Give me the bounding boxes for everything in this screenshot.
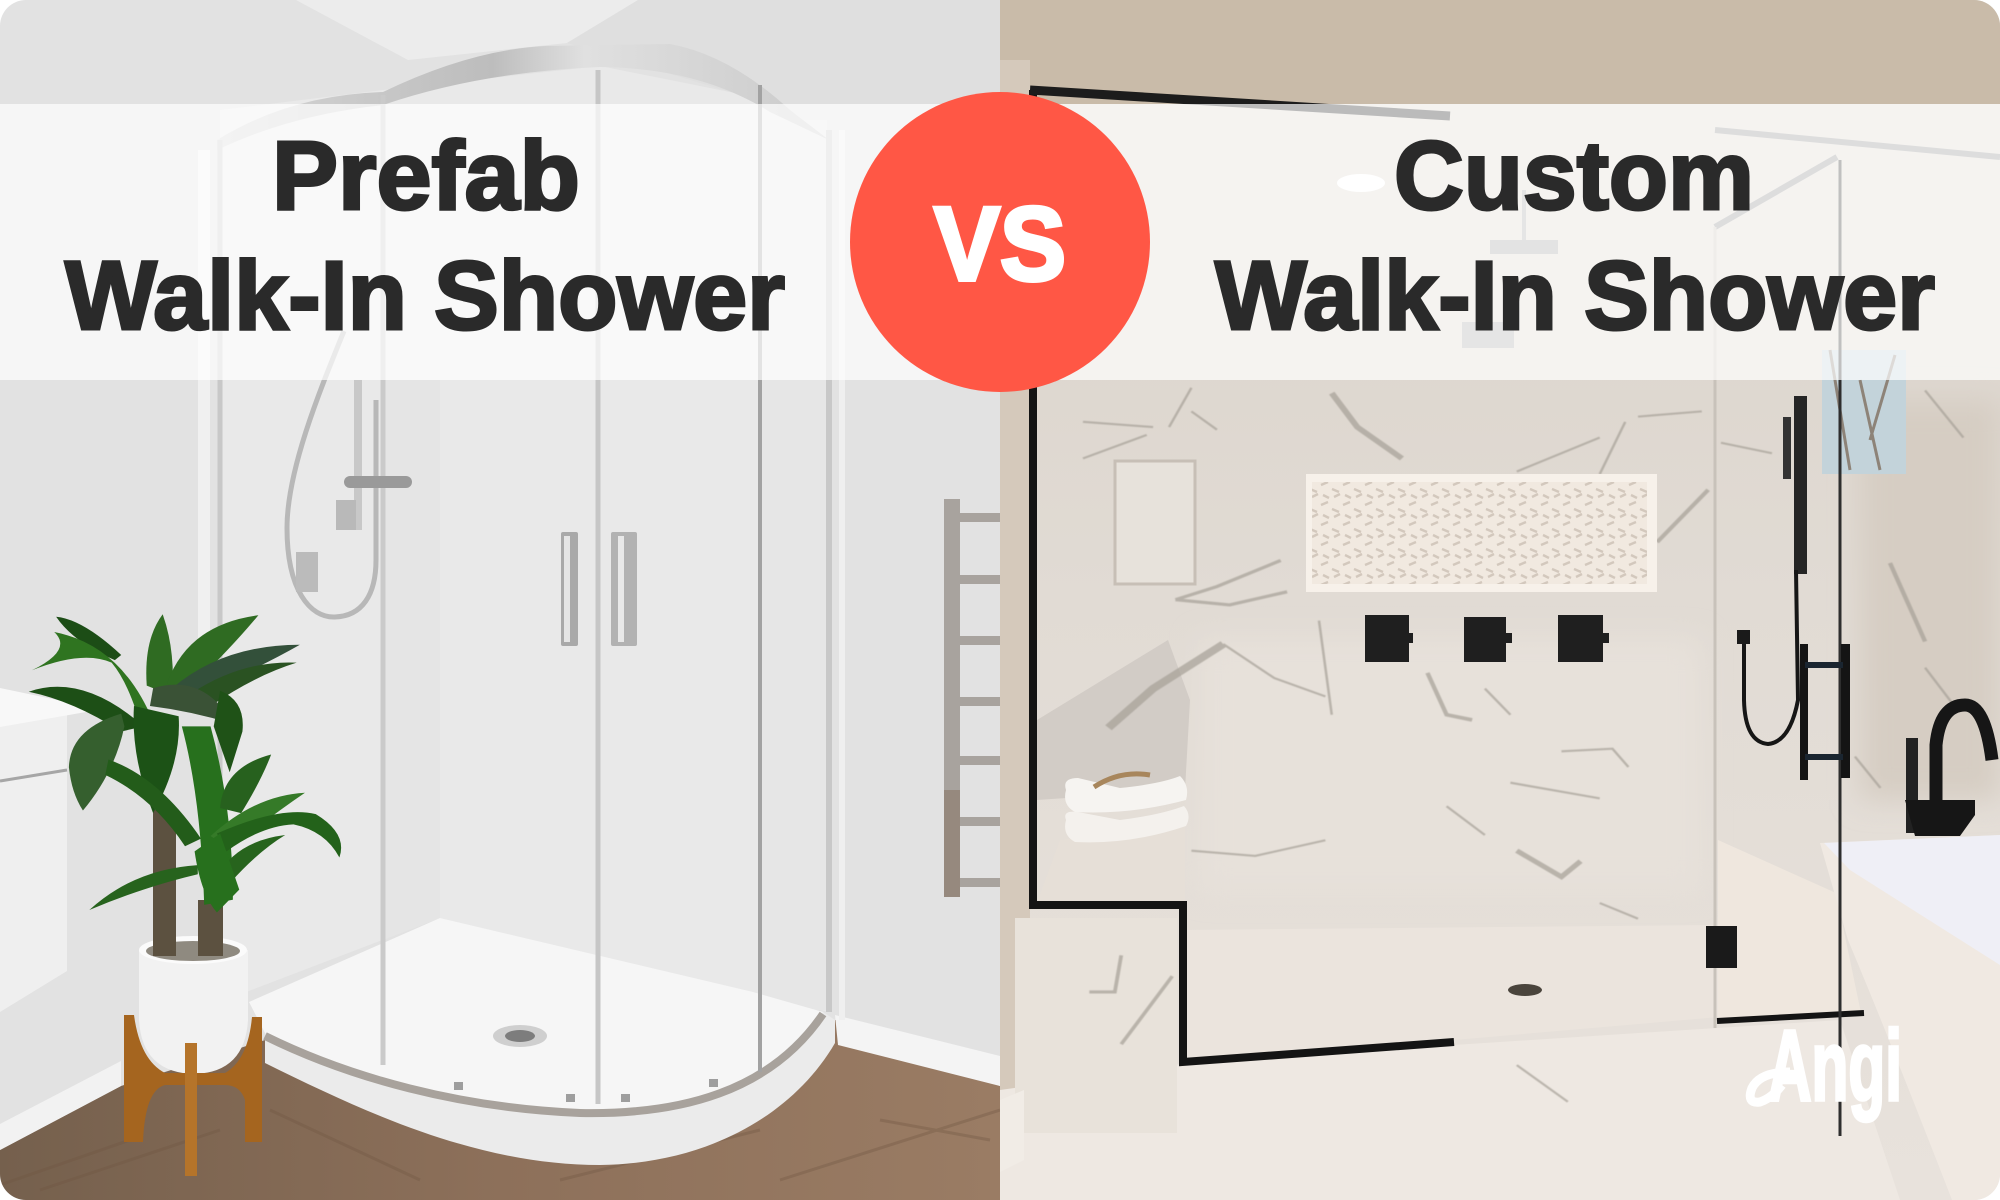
wooden stand (124, 1015, 262, 1176)
lit side bench (1718, 840, 1861, 1018)
drain (1508, 984, 1542, 996)
soft marble light patches (1857, 403, 2000, 804)
heading: custom walk-in shower (1215, 121, 1935, 350)
tray chrome rim (265, 1014, 823, 1113)
bench front (1015, 918, 1030, 1088)
shower hose, bar and valve (287, 331, 412, 617)
towel rail (944, 499, 1000, 897)
wall valves (1365, 615, 1609, 662)
bench alcove shade (1037, 640, 1190, 800)
door handles (561, 532, 637, 646)
right skirting board (835, 1015, 1000, 1086)
wall reflection frame (1115, 461, 1195, 584)
heading: prefab walk-in shower (65, 121, 785, 350)
ceiling wedge (296, 0, 638, 60)
upper right wall shade (567, 0, 1000, 110)
top black rail (1030, 90, 1450, 116)
bench seat (1037, 825, 1185, 903)
plant leaves (29, 614, 341, 913)
right threshold (1717, 1013, 1864, 1021)
band wall (1000, 104, 2000, 380)
left skirting board (0, 1061, 121, 1150)
drain (493, 1025, 547, 1047)
bathroom wall (0, 0, 1000, 1200)
vanity cabinet (0, 688, 86, 1012)
vs badge: VS (934, 186, 1066, 303)
plant trunks (153, 810, 223, 925)
skirting (1000, 1090, 1024, 1172)
rain shower heads and ceiling light (1337, 174, 1558, 348)
heading: custom walk-in shower: Walk-In Shower (1215, 241, 1935, 350)
roller clips (454, 1079, 718, 1102)
right glass panel tint (761, 120, 827, 1010)
window view (1822, 350, 1906, 474)
photo: custom walk-in shower (1000, 0, 2000, 1200)
heading: prefab walk-in shower: Walk-In Shower (65, 241, 785, 350)
beige ceiling wall (1000, 0, 2000, 104)
tub faucet (1905, 705, 1992, 836)
heading: custom walk-in shower: Custom (1394, 121, 1754, 230)
freestanding bathtub (1820, 835, 2000, 1200)
potted plant (29, 614, 341, 1176)
bathroom floor (1000, 1020, 1848, 1100)
shower tray (249, 918, 823, 1110)
shower frame posts and glass edges (204, 70, 842, 1104)
lit wall niche (1306, 474, 1657, 592)
glass door edges and handle (1706, 160, 1850, 1136)
photo: prefab walk-in shower (0, 0, 1000, 1200)
angi logo: Angi (1768, 1010, 1902, 1122)
marble veins (1083, 388, 1963, 1102)
angi logo (1750, 1010, 1902, 1122)
black shower frame (1033, 90, 1454, 1062)
tray skirt (265, 1012, 835, 1165)
vs badge (850, 92, 1150, 392)
shower back wall (220, 66, 829, 1012)
shower inner corner shade (383, 380, 440, 940)
shower top rail (294, 46, 824, 138)
marble wall (1000, 0, 2000, 1200)
band glass rail (1715, 130, 2000, 227)
translucent title band (0, 104, 2000, 380)
wood floor (0, 1020, 1000, 1200)
heading: prefab walk-in shower: Prefab (272, 121, 580, 230)
left wall strip (1000, 60, 1030, 1100)
hand shower and hose (1737, 396, 1807, 744)
shower floor (1182, 925, 1800, 1062)
white pot (139, 925, 248, 1074)
towels (1065, 774, 1189, 842)
